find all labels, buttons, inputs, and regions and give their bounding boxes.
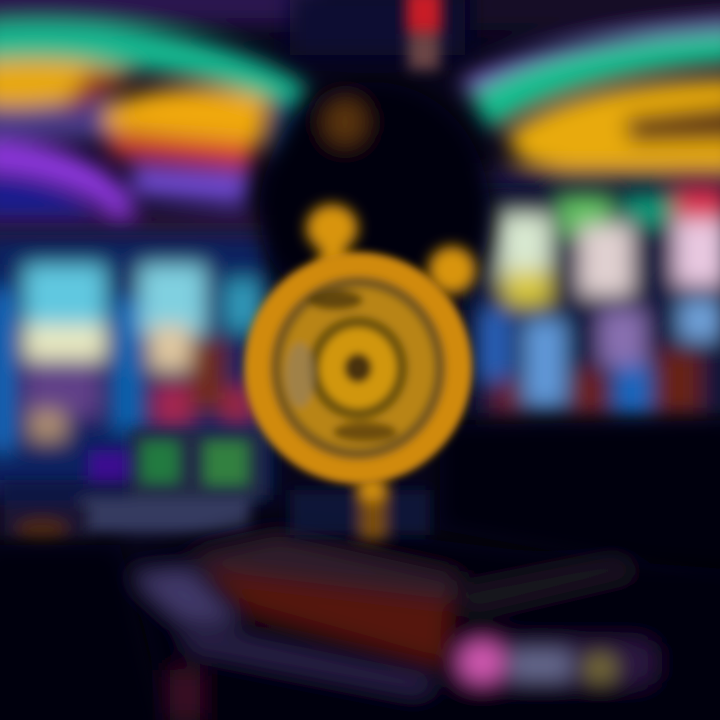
wheel stem <box>290 485 430 540</box>
dark right counter <box>440 420 720 590</box>
podium base <box>130 520 720 720</box>
right slot machines <box>470 185 720 420</box>
dark bottom left <box>0 545 170 720</box>
dark top figure behind wheel <box>260 0 491 290</box>
left slot machines <box>0 235 270 495</box>
icon: golden ship wheel <box>244 204 476 540</box>
small screens <box>0 430 265 542</box>
wheel handles <box>306 204 476 502</box>
top left rainbow lights <box>0 0 320 245</box>
wheel disc <box>244 252 472 484</box>
red top post <box>406 0 442 70</box>
top right rainbow lights <box>460 0 720 190</box>
